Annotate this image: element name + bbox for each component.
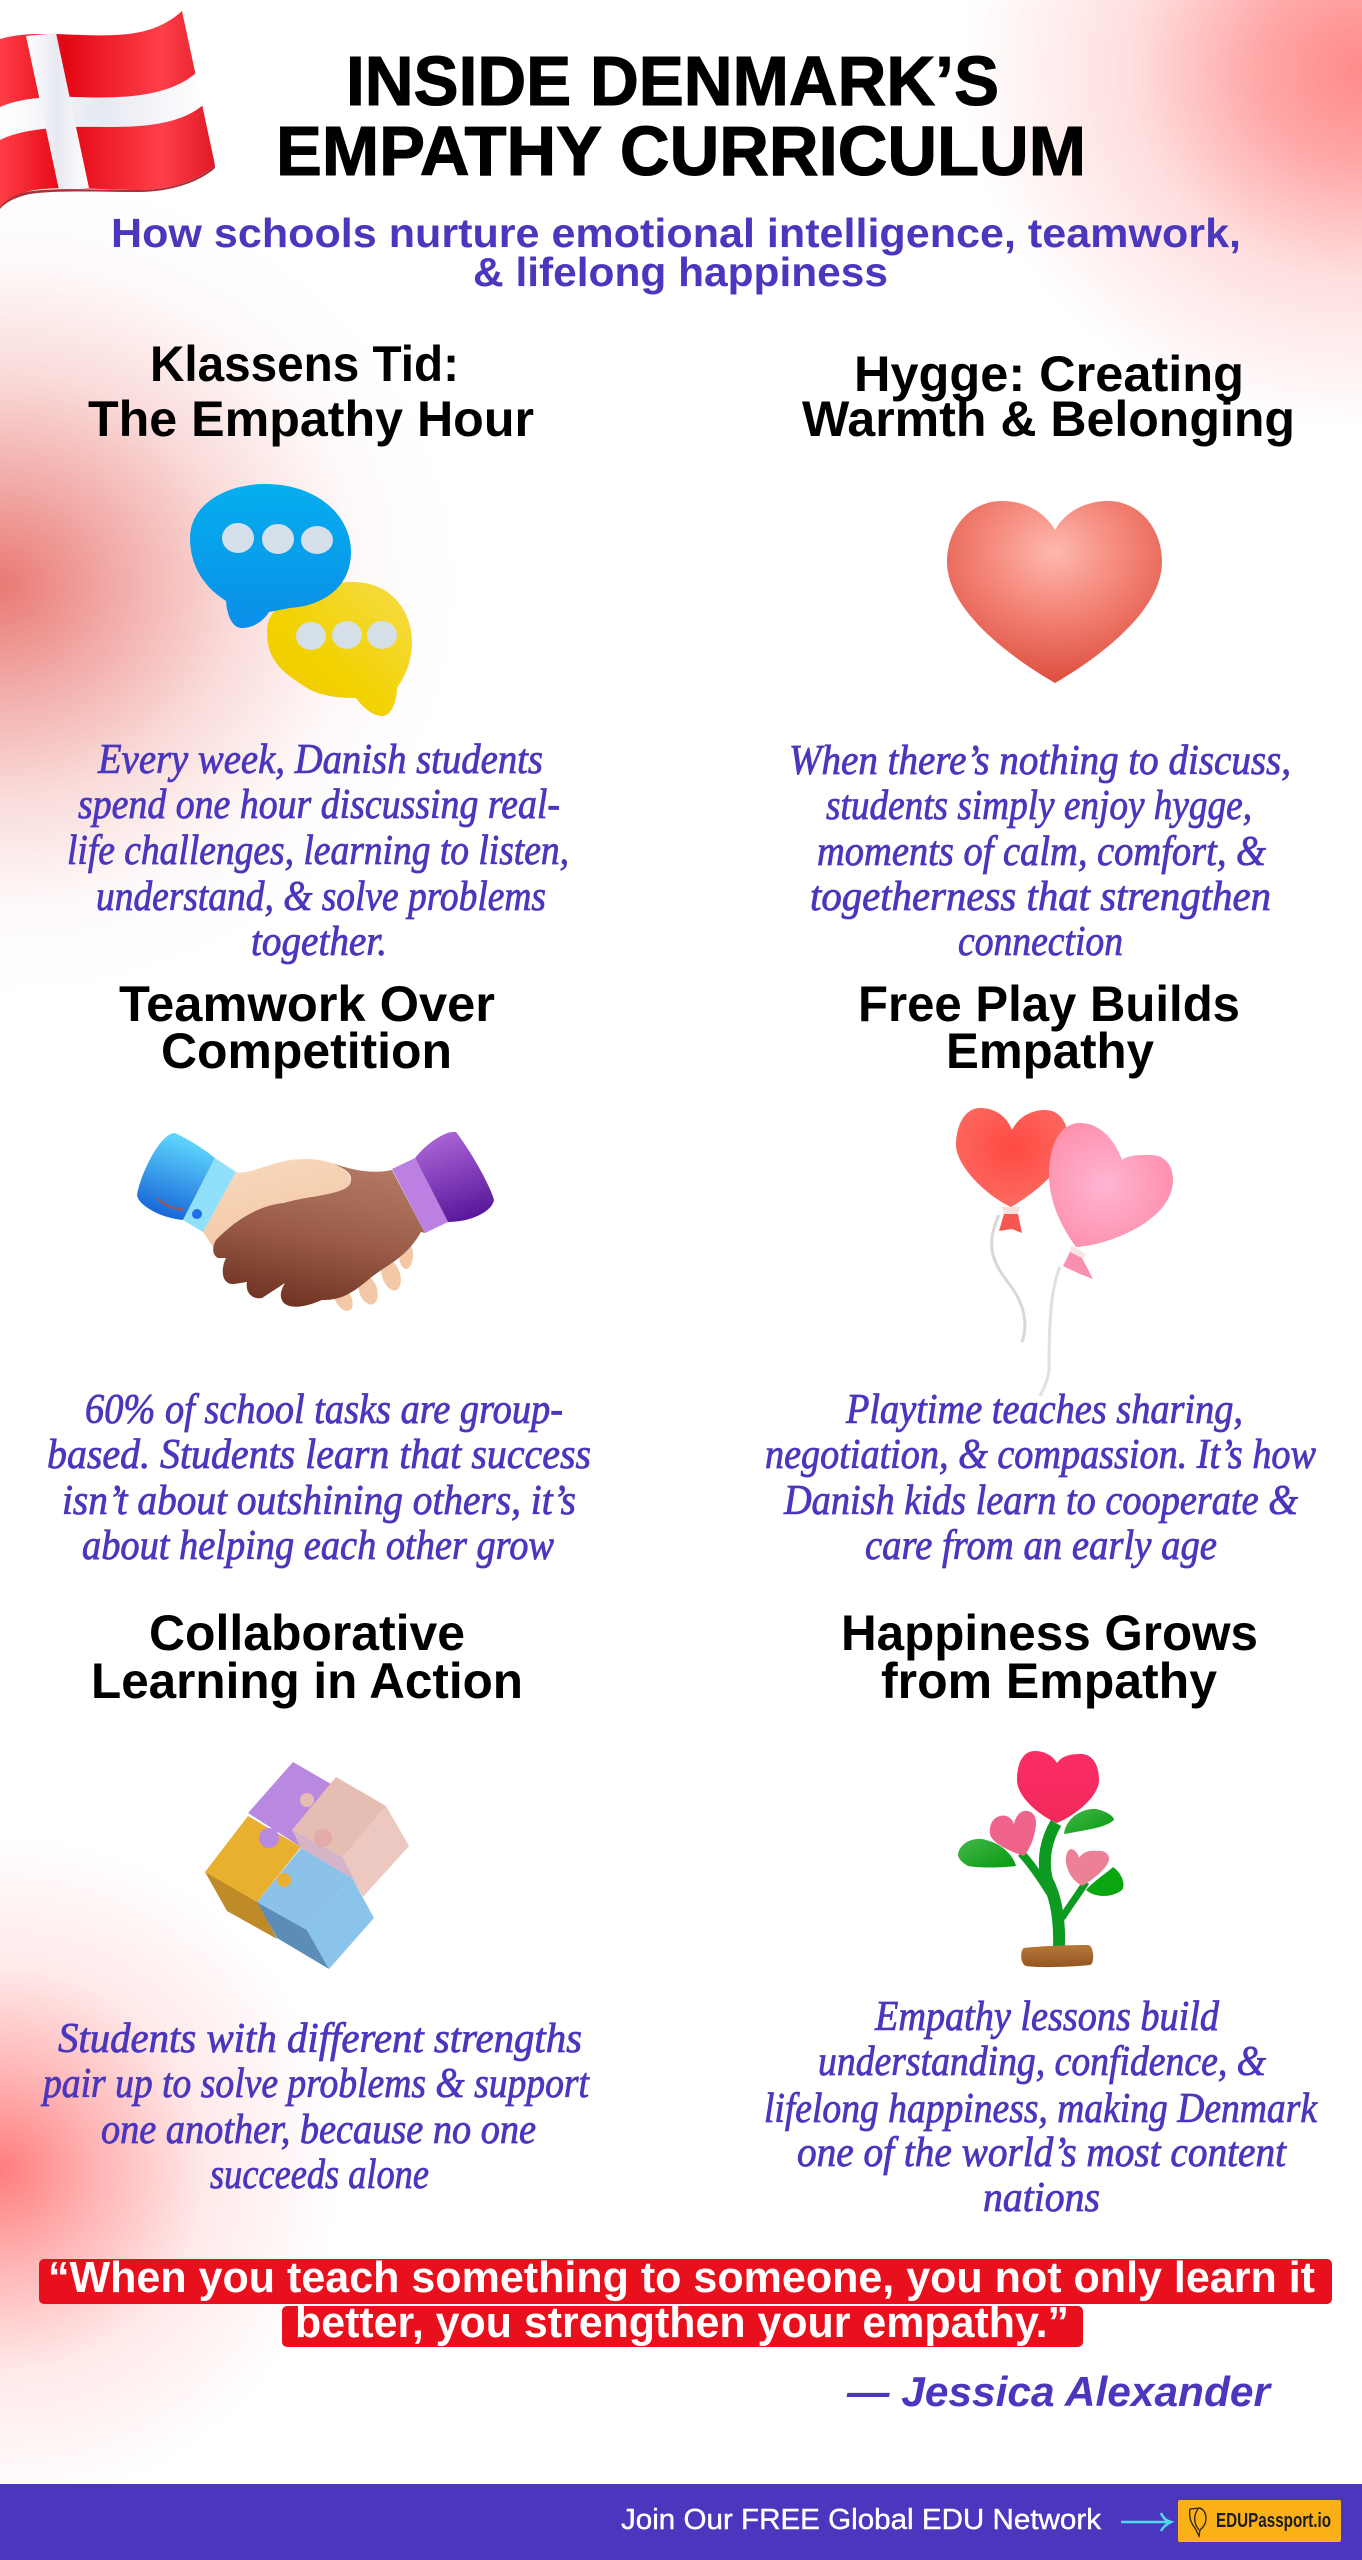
text: Hygge description: When there’s nothing to discuss, — [789, 738, 1291, 784]
panel: Teamwork — [47, 976, 591, 1569]
heading: Collaborative Learning: Learning in Action — [91, 1653, 523, 1709]
heading: Happiness Grows — [841, 1605, 1258, 1709]
text: Collaborative description: succeeds alone — [210, 2152, 429, 2198]
text: Teamwork description: about helping each other grow — [82, 1523, 554, 1569]
heading: Hygge — [802, 346, 1295, 447]
panel: Collaborative Learning — [40, 1605, 590, 2198]
callout: quote: better, you strengthen your empathy.” — [295, 2298, 1069, 2347]
text: Hygge description — [789, 738, 1291, 965]
callout: quote: “When you teach something to someone, you not only learn it — [48, 2253, 1315, 2302]
text: Klassens Tid description — [67, 737, 569, 965]
text: Klassens Tid description: spend one hour discussing real- — [78, 782, 560, 828]
text: Free Play description — [765, 1387, 1316, 1569]
heading: Teamwork: Competition — [161, 1023, 452, 1079]
text: Klassens Tid description: life challenges, learning to listen, — [67, 828, 569, 874]
text: Hygge description: connection — [958, 919, 1123, 965]
arrow — [1121, 2513, 1171, 2531]
footer band — [0, 2484, 1362, 2560]
text: Klassens Tid description: understand, & solve problems — [96, 874, 546, 920]
text: Happiness description — [764, 1994, 1318, 2221]
text: Klassens Tid description: together. — [251, 919, 387, 965]
panel: Hygge — [789, 346, 1295, 965]
quote attribution: — Jessica Alexander — [846, 2368, 1273, 2415]
heading: Teamwork — [119, 976, 495, 1079]
callout: quote — [39, 2253, 1332, 2347]
text: Collaborative description: one another, because no one — [101, 2107, 536, 2153]
heading: Hygge: Warmth & Belonging — [802, 391, 1295, 447]
text: Happiness description: Empathy lessons build — [874, 1994, 1220, 2040]
text: Teamwork description: based. Students learn that success — [47, 1432, 591, 1478]
heading: Free Play — [858, 976, 1240, 1079]
text: Free Play description: Playtime teaches sharing, — [845, 1387, 1243, 1433]
heading: Free Play: Free Play Builds — [858, 976, 1240, 1032]
text: Teamwork description — [47, 1387, 591, 1569]
subtitle: & lifelong happiness — [473, 249, 888, 295]
heading: Klassens Tid — [88, 336, 534, 447]
heading: Happiness Grows: Happiness Grows — [841, 1605, 1258, 1661]
heading: Collaborative Learning — [91, 1605, 523, 1709]
panel: Happiness Grows — [764, 1605, 1318, 2221]
text: Hygge description: moments of calm, comfort, & — [817, 829, 1266, 875]
text: Collaborative description: Students with different strengths — [58, 2016, 582, 2062]
icon: heart plant — [958, 1751, 1124, 1967]
icon: chat bubbles — [190, 484, 412, 716]
heading: Klassens Tid: The Empathy Hour — [88, 391, 534, 447]
text: Klassens Tid description: Every week, Danish students — [97, 737, 543, 783]
icon: handshake — [137, 1132, 494, 1314]
text: Happiness description: nations — [983, 2175, 1100, 2221]
logo: EDUPassport.io — [1178, 2500, 1341, 2542]
heading: Klassens Tid: Klassens Tid: — [150, 336, 459, 392]
icon: puzzle cube — [205, 1762, 409, 1969]
text: Hygge description: students simply enjoy hygge, — [826, 783, 1252, 829]
text: Happiness description: understanding, confidence, & — [818, 2039, 1266, 2085]
heading: Teamwork: Teamwork Over — [119, 976, 495, 1032]
icon: Danish flag — [0, 11, 215, 209]
subtitle: How schools nurture emotional intelligence, teamwork, — [111, 210, 1241, 256]
text: Teamwork description: isn’t about outshining others, it’s — [62, 1478, 576, 1524]
subtitle — [111, 210, 1241, 295]
text: Happiness description: one of the world’s most content — [797, 2130, 1287, 2176]
text: Free Play description: care from an early age — [865, 1523, 1217, 1569]
panel: Klassens Tid — [67, 336, 569, 965]
icon: heart balloons — [956, 1108, 1173, 1396]
footer call to action: Join Our FREE Global EDU Network — [621, 2504, 1102, 2536]
heading: Hygge: Hygge: Creating — [854, 346, 1244, 402]
text: Hygge description: togetherness that strengthen — [810, 874, 1271, 920]
text: Teamwork description: 60% of school tasks are group- — [85, 1387, 563, 1433]
heading: Happiness Grows: from Empathy — [881, 1653, 1217, 1709]
title: INSIDE DENMARK’S — [346, 42, 999, 120]
title — [276, 42, 1086, 190]
text: Collaborative description — [40, 2016, 590, 2198]
heading: Free Play: Empathy — [946, 1023, 1154, 1079]
title: EMPATHY CURRICULUM — [276, 112, 1086, 190]
text: Free Play description: Danish kids learn to cooperate & — [783, 1478, 1298, 1524]
text: Collaborative description: pair up to solve problems & support — [40, 2061, 590, 2107]
text: Free Play description: negotiation, & compassion. It’s how — [765, 1432, 1316, 1478]
panel: Free Play — [765, 976, 1316, 1569]
heading: Collaborative Learning: Collaborative — [149, 1605, 465, 1661]
icon: heart — [947, 501, 1162, 683]
